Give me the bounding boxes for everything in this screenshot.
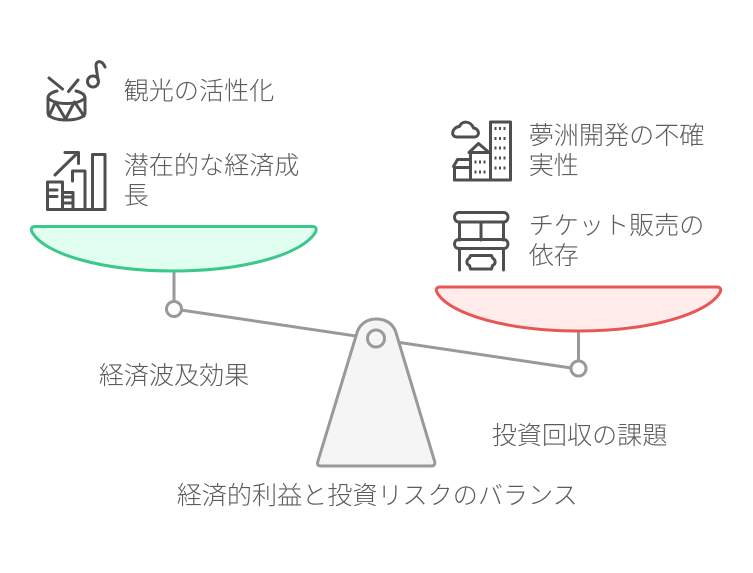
title: 経済的利益と投資リスクのバランス: [177, 482, 578, 510]
fulcrum pivot: [368, 330, 384, 347]
icon: cityscape with cloud: [453, 122, 510, 180]
label: economic ripple effect: 経済波及効果: [99, 362, 249, 390]
right pivot circle: [571, 361, 586, 376]
scale beam: [174, 309, 578, 369]
text: Yumeshima development uncertainty: 夢洲開発の不確: [529, 122, 704, 150]
panel: risks pan (red): [436, 287, 721, 331]
icon: growth chart with buildings: [48, 152, 105, 210]
right pan stem: [577, 331, 580, 361]
text: economic growth potential: 長: [124, 182, 149, 210]
icon: ticket booth: [454, 212, 508, 270]
text: tourism revitalization: 観光の活性化: [124, 78, 274, 106]
text: ticket sales dependence: 依存: [529, 242, 579, 270]
label: investment recovery issue: 投資回収の課題: [492, 422, 667, 450]
panel: benefits pan (green): [31, 226, 316, 271]
fulcrum base: [318, 319, 435, 466]
text: ticket sales dependence: チケット販売の: [529, 212, 704, 240]
text: economic growth potential: 潜在的な経済成: [124, 152, 299, 180]
icon: drum and music note: [48, 62, 105, 120]
left pivot circle: [166, 302, 182, 316]
text: Yumeshima development uncertainty: 実性: [529, 152, 579, 180]
left pan stem: [172, 271, 176, 302]
